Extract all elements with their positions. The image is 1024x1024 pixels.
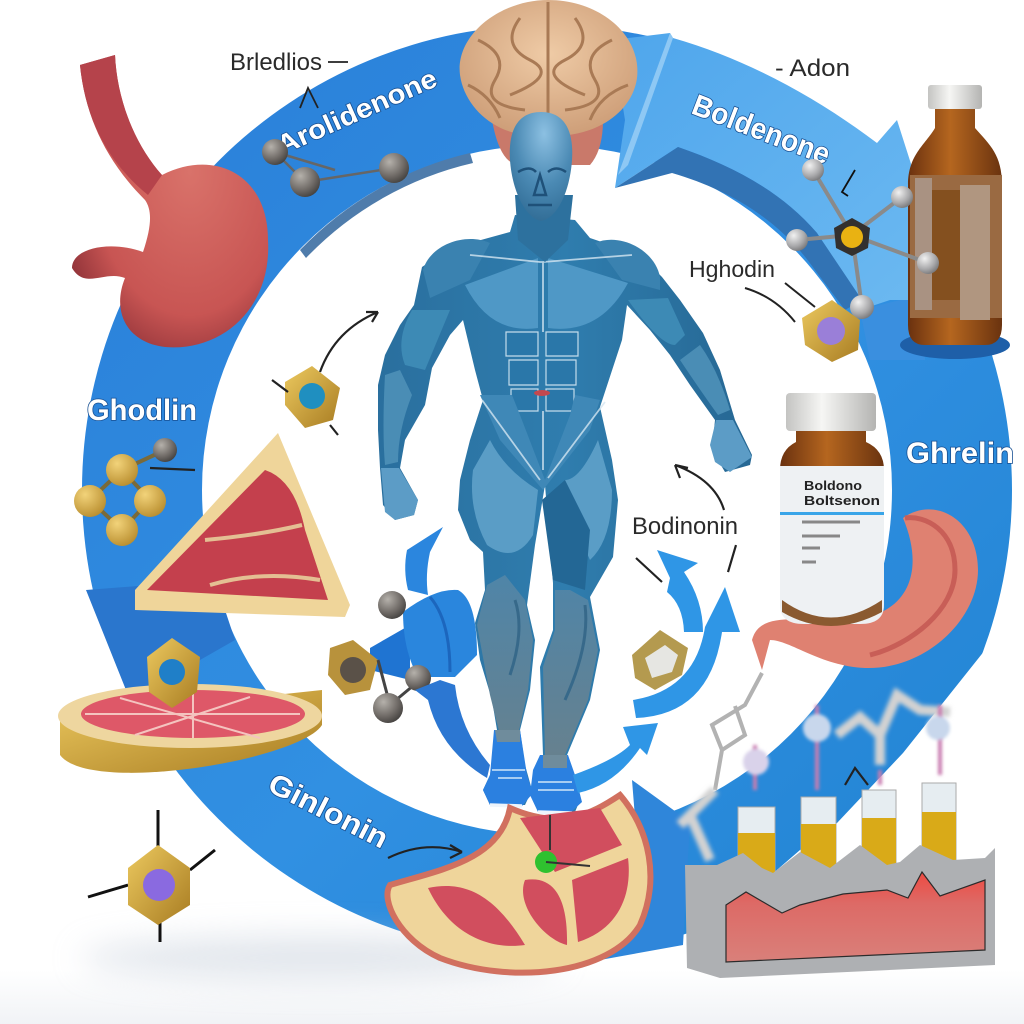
white gap in lower right of ring bbox=[690, 640, 1024, 1024]
thighs bbox=[472, 440, 612, 560]
head bbox=[510, 112, 572, 221]
neck bbox=[515, 195, 573, 262]
label: Arolidenone: Arolidenone bbox=[272, 63, 442, 160]
labelled pill bottle bbox=[780, 393, 884, 626]
test tubes and chart block bbox=[680, 673, 995, 978]
hexagon blue left bbox=[147, 638, 200, 708]
brain bbox=[460, 0, 637, 165]
meat disc bbox=[58, 684, 322, 773]
molecule top right bbox=[786, 159, 939, 319]
thin curved arrows bbox=[150, 312, 868, 858]
labelled pill bottle: Boldono bbox=[804, 478, 862, 493]
gold ring molecule bbox=[74, 438, 177, 546]
floor shadow bbox=[0, 936, 1024, 1024]
body silhouette bbox=[378, 215, 752, 812]
small gold cube bbox=[632, 630, 688, 690]
upper arms and forearms bbox=[401, 298, 685, 370]
hexagon purple bottom bbox=[88, 810, 215, 942]
hexagon purple upper bbox=[802, 300, 860, 362]
chest bbox=[465, 258, 628, 329]
label: Ginlonin: Ginlonin bbox=[263, 768, 393, 855]
upper right light arrow bbox=[612, 33, 925, 310]
blue swirl arrows bbox=[405, 527, 740, 793]
label: Hghodin: Hghodin bbox=[689, 256, 775, 282]
label: Boldenone: Boldenone bbox=[687, 89, 835, 171]
meat wedge bbox=[135, 433, 350, 617]
blue cylinder molecule bbox=[328, 590, 477, 723]
shins bbox=[477, 575, 598, 755]
label: Hghodin bbox=[689, 256, 815, 322]
hexagon teal left bbox=[285, 366, 340, 428]
abdomen and groin bbox=[480, 395, 600, 490]
label: Adon: - Adon bbox=[775, 55, 850, 82]
human muscular figure bbox=[378, 112, 752, 813]
deltoids bbox=[423, 239, 660, 298]
hands bbox=[381, 420, 752, 520]
stomach top left bbox=[72, 55, 268, 347]
label: Brledlios: Brledlios bbox=[230, 49, 322, 76]
labelled pill bottle: Boltsenon bbox=[804, 493, 880, 508]
molecule top left bbox=[262, 139, 409, 197]
label: Ghrelin: Ghrelin bbox=[906, 437, 1014, 470]
stomach right bbox=[752, 509, 978, 670]
label: Bodinonin: Bodinonin bbox=[632, 513, 738, 540]
label: Ghodlin: Ghodlin bbox=[87, 394, 197, 427]
brown glass bottle bbox=[900, 85, 1010, 359]
shoes bbox=[483, 730, 582, 813]
label: Brledlios bbox=[230, 49, 348, 108]
abs bbox=[506, 332, 578, 411]
tissue slice bottom bbox=[387, 795, 650, 973]
